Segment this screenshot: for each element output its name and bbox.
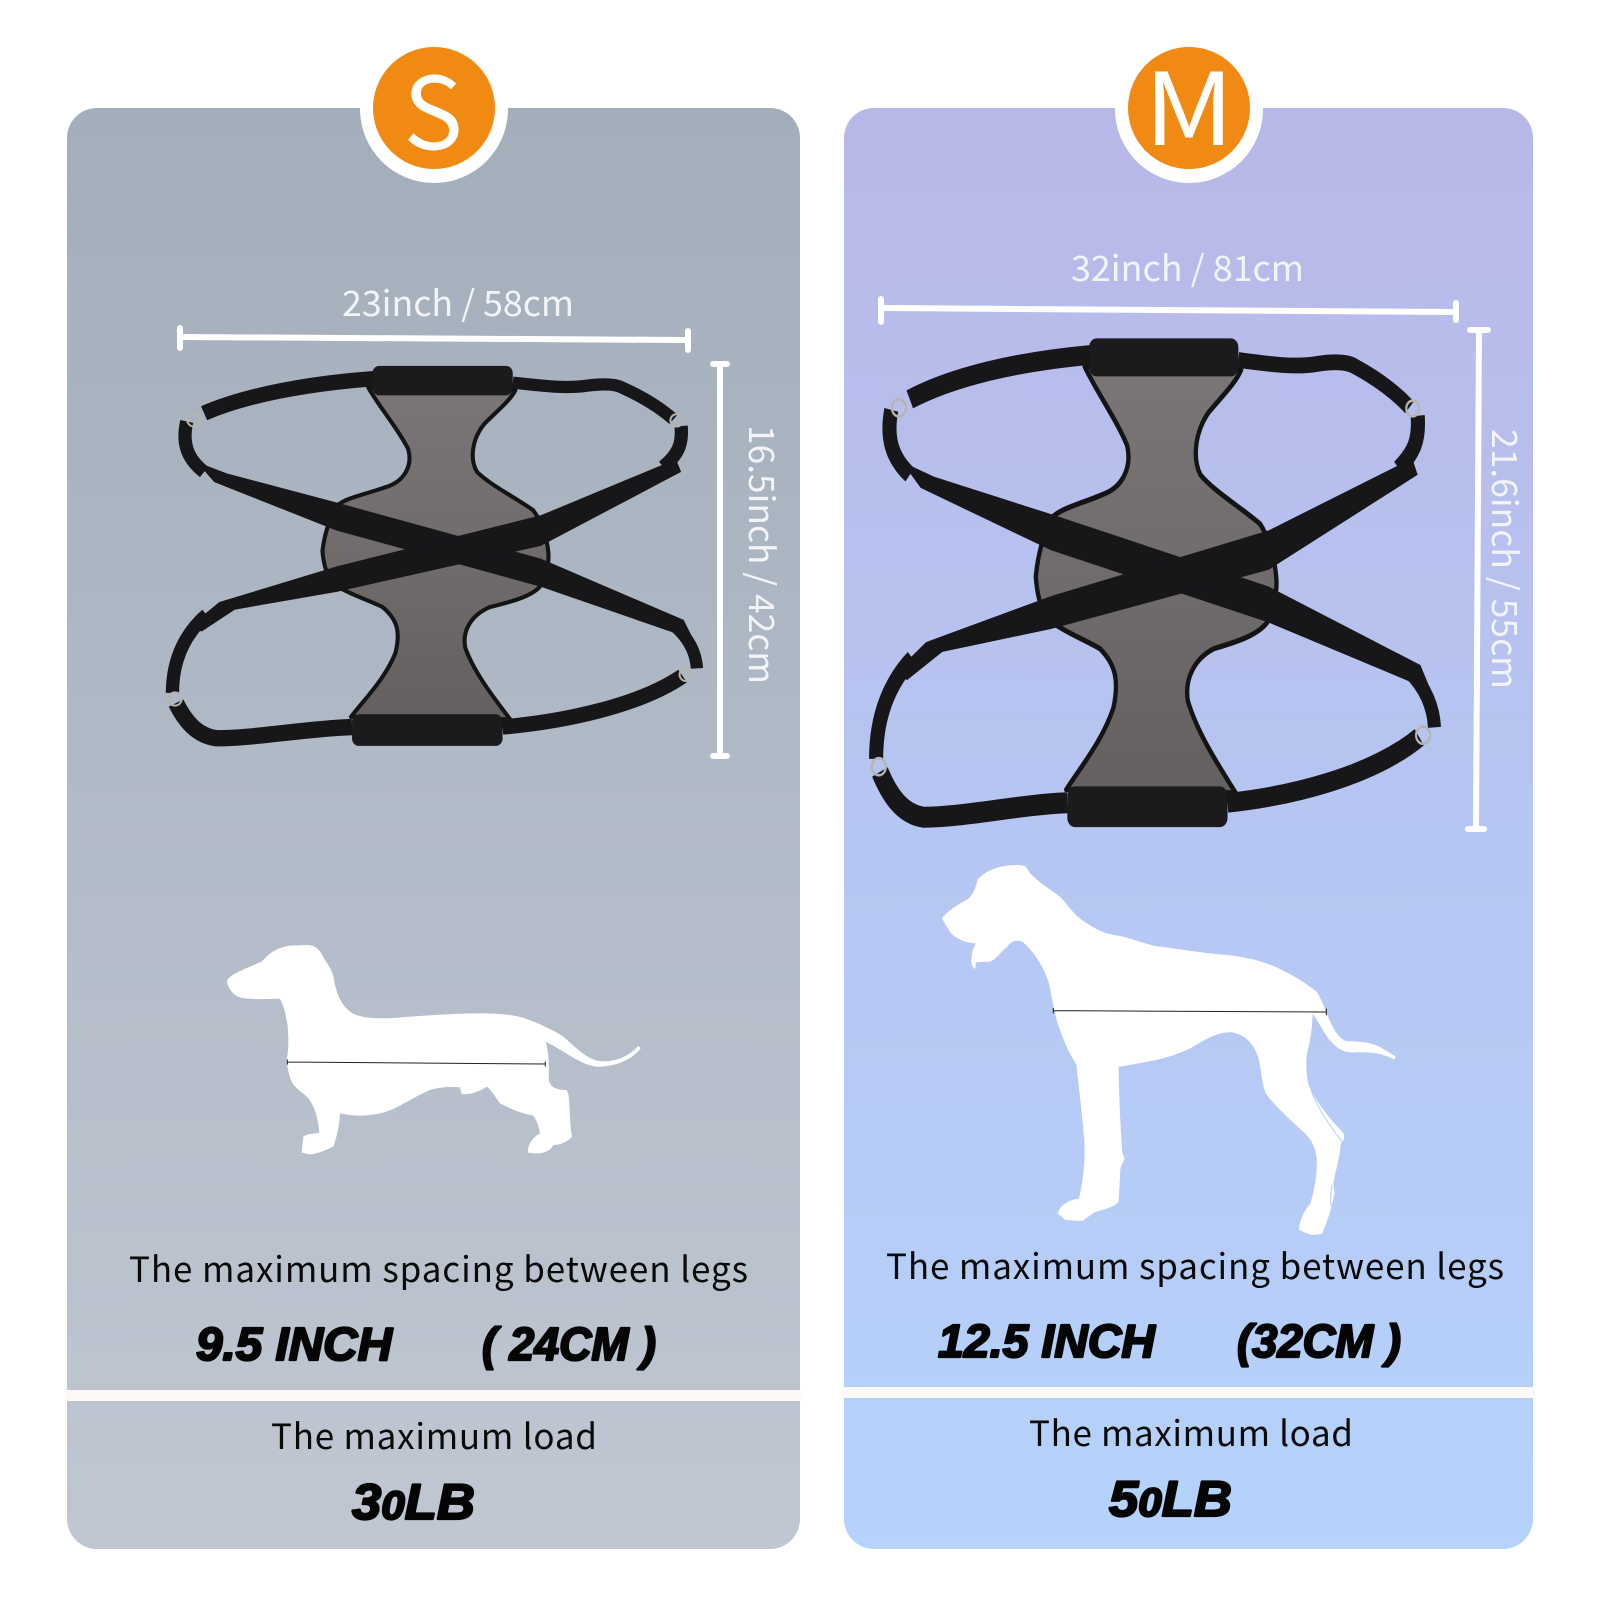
panel background M [844, 108, 1533, 1549]
harness S [168, 366, 697, 746]
height dimension S [713, 364, 789, 756]
size badge M: M [1144, 29, 1234, 174]
panel background S [67, 108, 800, 1549]
harness top pad [372, 366, 513, 395]
height dimension M: 21.6inch / 55cm [1481, 429, 1532, 689]
panel: size M [842, 29, 1535, 1549]
harness bottom pad [1067, 786, 1228, 827]
load value S: 30LB [352, 1474, 475, 1530]
spacing value M: (32CM ) [1237, 1315, 1401, 1367]
harness straps [172, 379, 697, 738]
harness fabric body [1036, 367, 1276, 793]
spacing value S: 9.5 INCH [196, 1318, 393, 1370]
height dimension S: 16.5inch / 42cm [738, 425, 789, 684]
harness fabric body [322, 388, 549, 719]
width dimension S: 23inch / 58cm [342, 276, 574, 327]
panel: size S [65, 33, 802, 1549]
harness rings [872, 399, 1430, 775]
harness straps [876, 355, 1435, 817]
spacing label M: The maximum spacing between legs [886, 1239, 1504, 1290]
dachshund silhouette [227, 945, 641, 1154]
harness crossing straps [191, 459, 691, 635]
great dane silhouette [942, 865, 1396, 1235]
spacing value M [938, 1315, 1401, 1367]
size badge S: S [403, 33, 463, 178]
size badge M [1115, 29, 1263, 183]
width dimension S [180, 276, 688, 350]
harness rings [168, 413, 693, 706]
harness bottom pad [352, 714, 503, 746]
spacing value M: 12.5 INCH [938, 1315, 1156, 1367]
width dimension M [881, 241, 1456, 322]
divider M [842, 1387, 1535, 1398]
harness top pad [1089, 338, 1238, 376]
width dimension M: 32inch / 81cm [1071, 241, 1304, 292]
load value M: 50LB [1109, 1471, 1232, 1527]
spacing label S: The maximum spacing between legs [129, 1242, 748, 1293]
harness M [872, 338, 1435, 827]
harness crossing straps [896, 458, 1429, 685]
height dimension M [1468, 330, 1532, 829]
divider S [65, 1390, 802, 1401]
load label S: The maximum load [271, 1409, 597, 1460]
load label M: The maximum load [1029, 1406, 1353, 1457]
spacing value S [196, 1318, 656, 1370]
spacing value S: ( 24CM ) [482, 1318, 656, 1370]
size badge S [360, 33, 508, 183]
